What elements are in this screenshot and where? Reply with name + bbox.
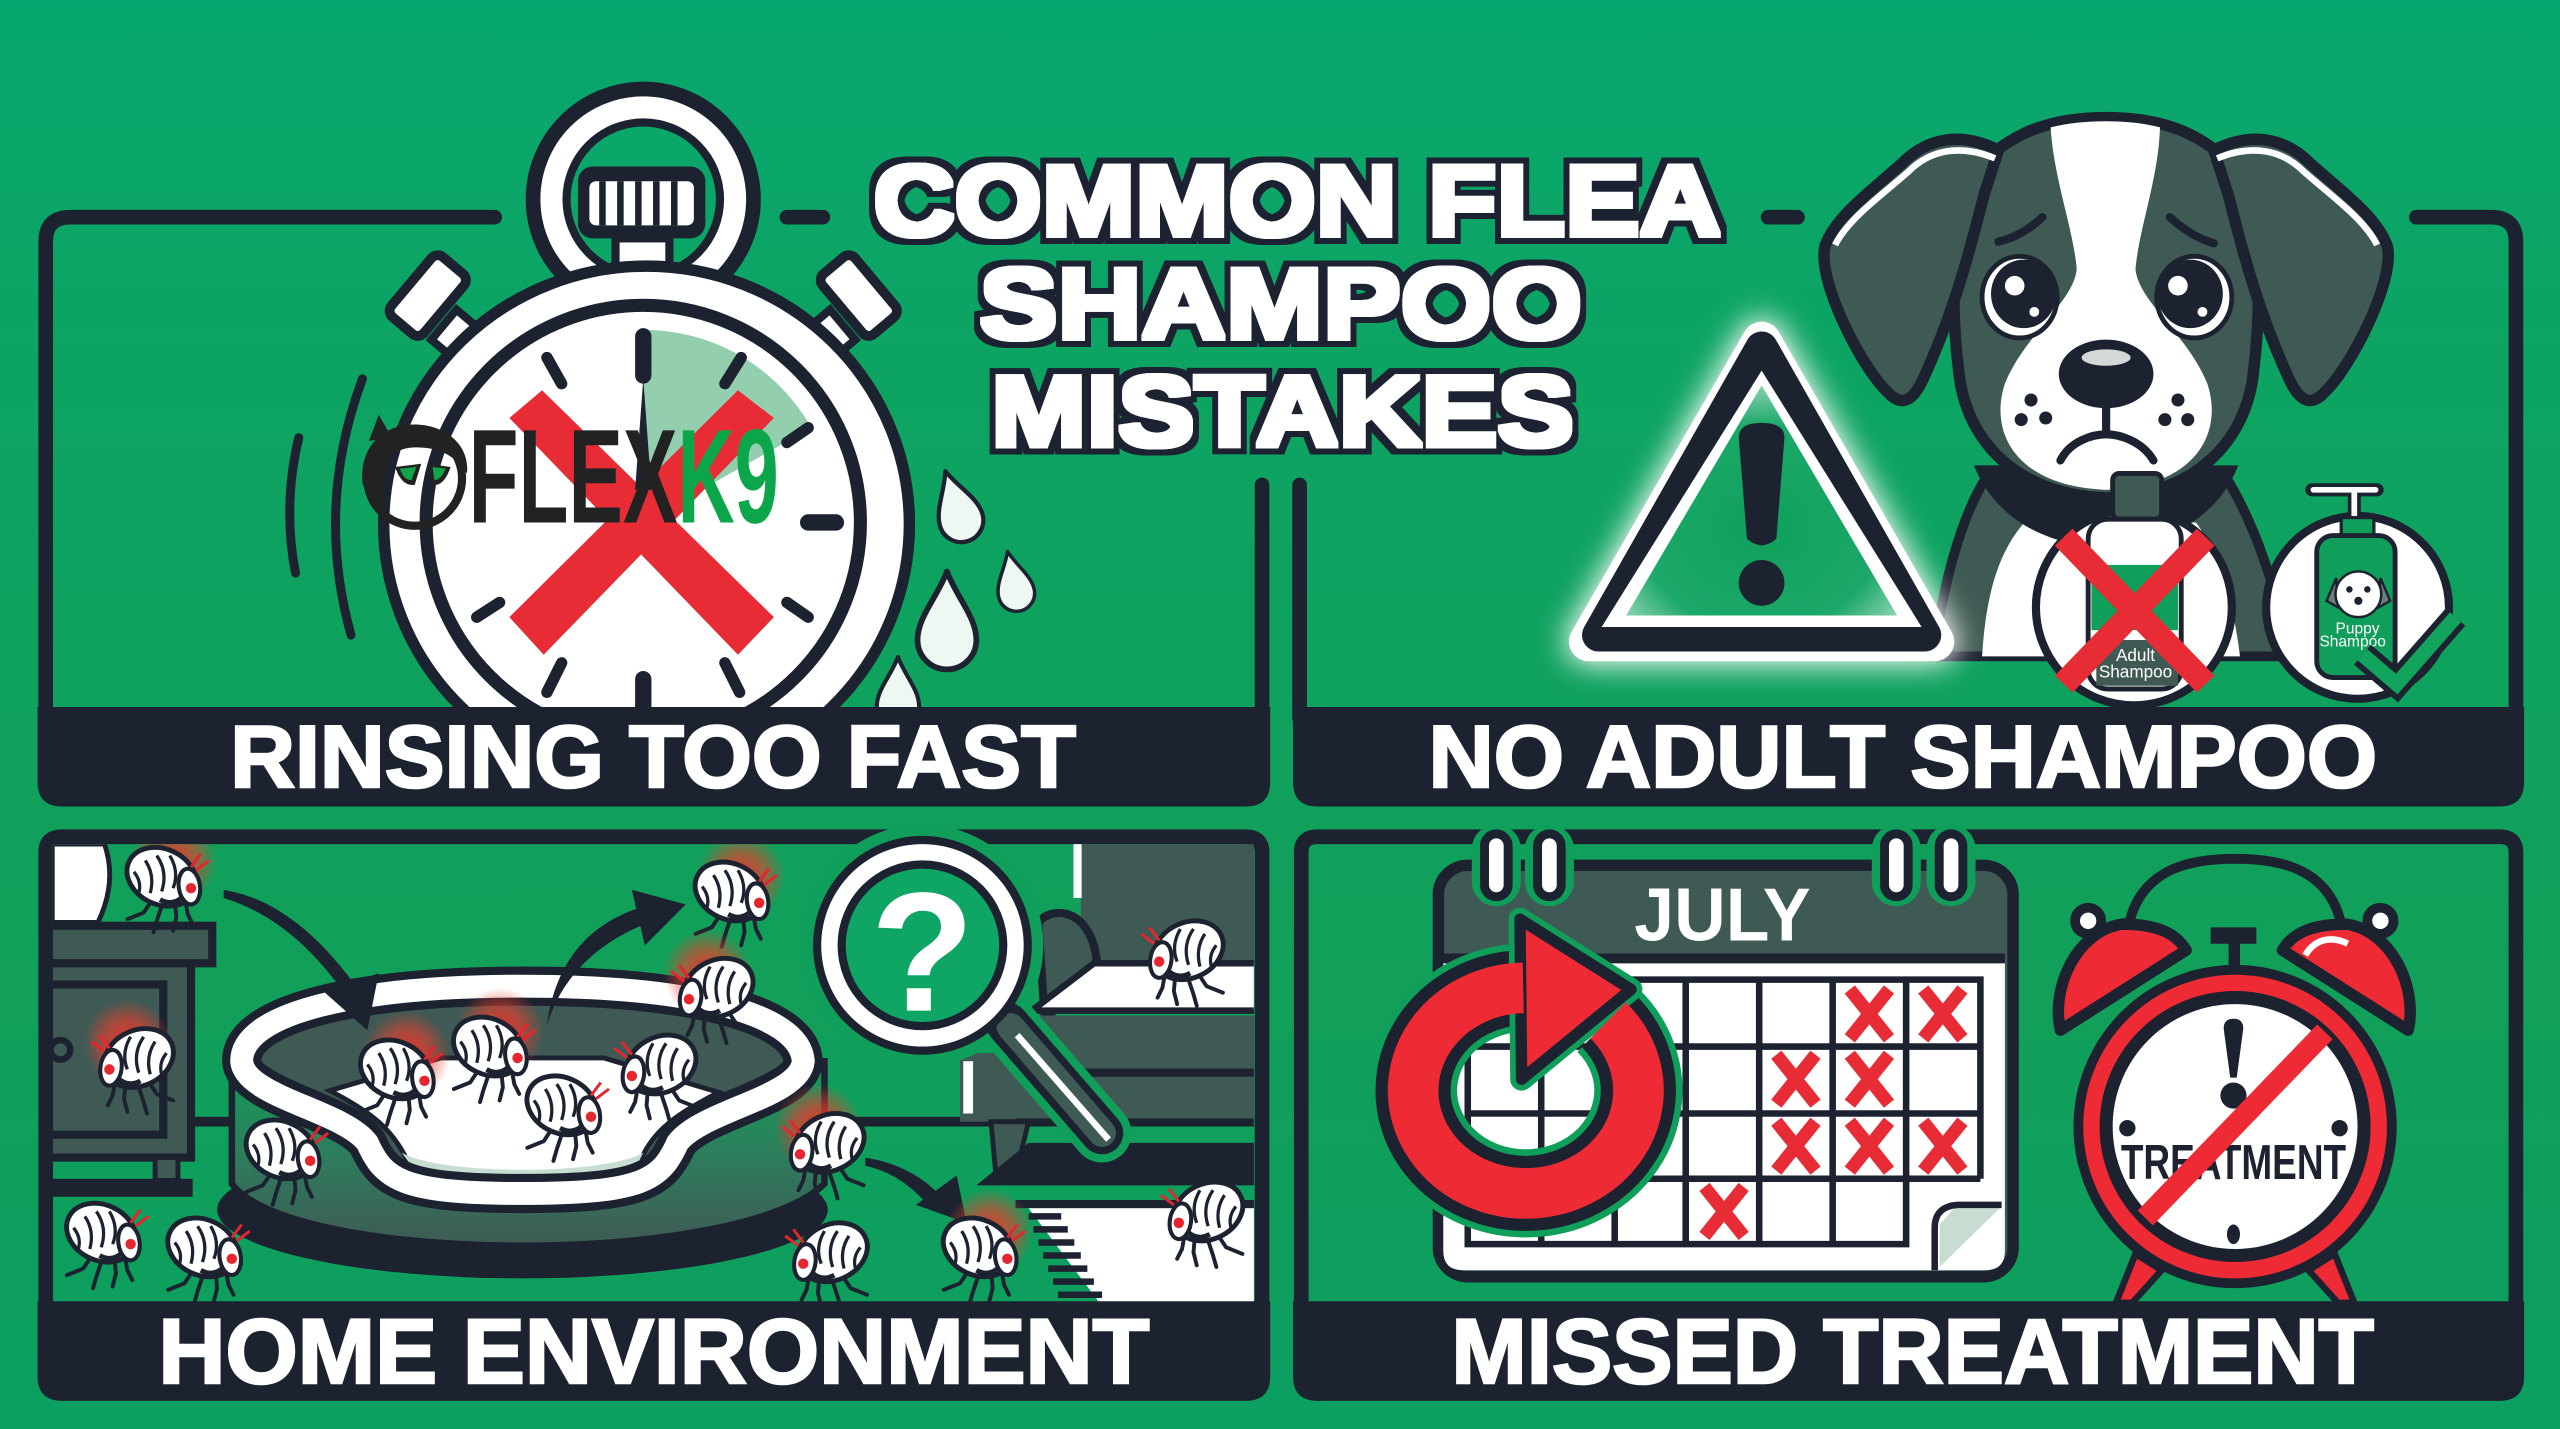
panel frame xyxy=(46,837,1262,1306)
icon: alarm clock xyxy=(2058,859,2410,1303)
home scene xyxy=(49,818,1257,1308)
clock knobs xyxy=(2075,908,2393,934)
caption bar xyxy=(38,707,1270,807)
icon: calendar xyxy=(1438,846,2013,1277)
stopwatch right button xyxy=(810,252,900,356)
left bell xyxy=(2058,924,2186,1030)
stopwatch body xyxy=(378,260,916,707)
logo: FlexK9 xyxy=(362,402,779,551)
right ear xyxy=(2214,139,2388,401)
caption: HOME ENVIRONMENT xyxy=(158,1301,1149,1403)
panel: missed treatment xyxy=(1293,837,2524,1403)
icon: warning triangle xyxy=(1589,341,1935,642)
dog bed xyxy=(217,986,828,1278)
eyes xyxy=(1982,256,2232,338)
caption bar xyxy=(1293,1301,2524,1401)
panel: no adult shampoo xyxy=(1293,118,2524,807)
arrow to rug head xyxy=(916,1176,965,1219)
logo wordmark: FLEX xyxy=(469,402,678,551)
exclamation dot xyxy=(2220,1082,2247,1109)
cabinet xyxy=(49,926,212,1197)
clock face label: TREATMENT xyxy=(2121,1136,2346,1190)
clock legs xyxy=(2116,1254,2354,1303)
icon: red repeat arrow xyxy=(1413,919,1638,1193)
stopwatch left button xyxy=(386,252,476,356)
calendar page xyxy=(1443,963,2005,1270)
exclamation xyxy=(2224,1019,2243,1078)
panel: rinsing too fast xyxy=(38,90,1270,807)
bell highlight xyxy=(2305,939,2348,955)
arrow into bed head xyxy=(325,973,379,1030)
green time wedge xyxy=(644,330,808,482)
hammer xyxy=(2211,927,2256,970)
arrow out of bed xyxy=(547,908,640,1025)
bottle label text: Adult xyxy=(2116,645,2155,665)
title line 1: COMMON FLEA xyxy=(873,146,1721,257)
bottle text: Puppy xyxy=(2336,620,2380,637)
arrow into bed xyxy=(224,890,350,982)
panel: home environment xyxy=(38,818,1270,1403)
arrow out of bed head xyxy=(632,890,686,945)
prohibition slash xyxy=(2145,1032,2325,1218)
water drops xyxy=(877,464,1038,728)
red X xyxy=(509,390,774,655)
nose and mouth xyxy=(2015,340,2194,460)
panel frame xyxy=(1301,837,2516,1306)
bottle text: Shampoo xyxy=(2319,634,2386,651)
clock body xyxy=(2078,970,2392,1283)
floor line xyxy=(193,1119,1254,1125)
fleas xyxy=(57,818,1252,1308)
puppy head xyxy=(1954,118,2258,498)
caption: MISSED TREATMENT xyxy=(1451,1301,2374,1403)
panel frame xyxy=(1300,217,2516,718)
calendar grid xyxy=(1468,980,1980,1244)
rug xyxy=(1016,1200,1257,1306)
clock handle xyxy=(2129,859,2341,924)
puppy body xyxy=(1933,465,2289,656)
title line 2: SHAMPOO xyxy=(980,249,1582,360)
white blaze and muzzle xyxy=(2000,121,2212,490)
logo dog head xyxy=(362,415,467,526)
icon: stopwatch xyxy=(384,90,909,782)
caption bar xyxy=(1293,707,2524,807)
caption bar xyxy=(38,1301,1270,1401)
calendar body xyxy=(1438,865,2013,1277)
calendar header label: JULY xyxy=(1634,872,1811,956)
stopwatch crown xyxy=(578,166,706,263)
arrow to rug xyxy=(865,1158,936,1200)
icon: magnifying glass xyxy=(802,825,1109,1140)
logo wordmark: K9 xyxy=(678,402,779,551)
lamp xyxy=(52,844,110,922)
missed day marks xyxy=(1704,989,1962,1236)
brows xyxy=(1998,217,2214,243)
calendar rings xyxy=(1496,846,1951,885)
bottle label text: Shampoo xyxy=(2099,662,2172,682)
caption: RINSING TOO FAST xyxy=(230,707,1076,806)
icon: crossed adult shampoo xyxy=(2036,473,2232,705)
left ear xyxy=(1824,139,1998,401)
clock hand xyxy=(635,379,651,490)
panel frame xyxy=(46,217,1262,784)
clock face dots xyxy=(2119,1120,2348,1244)
couch xyxy=(960,844,1257,1185)
title line 3: MISTAKES xyxy=(991,357,1574,468)
title xyxy=(873,146,1721,468)
clock ticks xyxy=(477,336,836,718)
question mark: ? xyxy=(871,857,974,1047)
page curl xyxy=(1935,1205,2002,1270)
right bell xyxy=(2282,924,2410,1030)
arrows xyxy=(224,890,967,1223)
motion lines xyxy=(290,379,362,635)
stopwatch top ring xyxy=(534,90,753,309)
icon: sad puppy xyxy=(1824,118,2388,656)
caption: NO ADULT SHAMPOO xyxy=(1429,707,2377,806)
icon: puppy shampoo with check xyxy=(2266,490,2456,699)
